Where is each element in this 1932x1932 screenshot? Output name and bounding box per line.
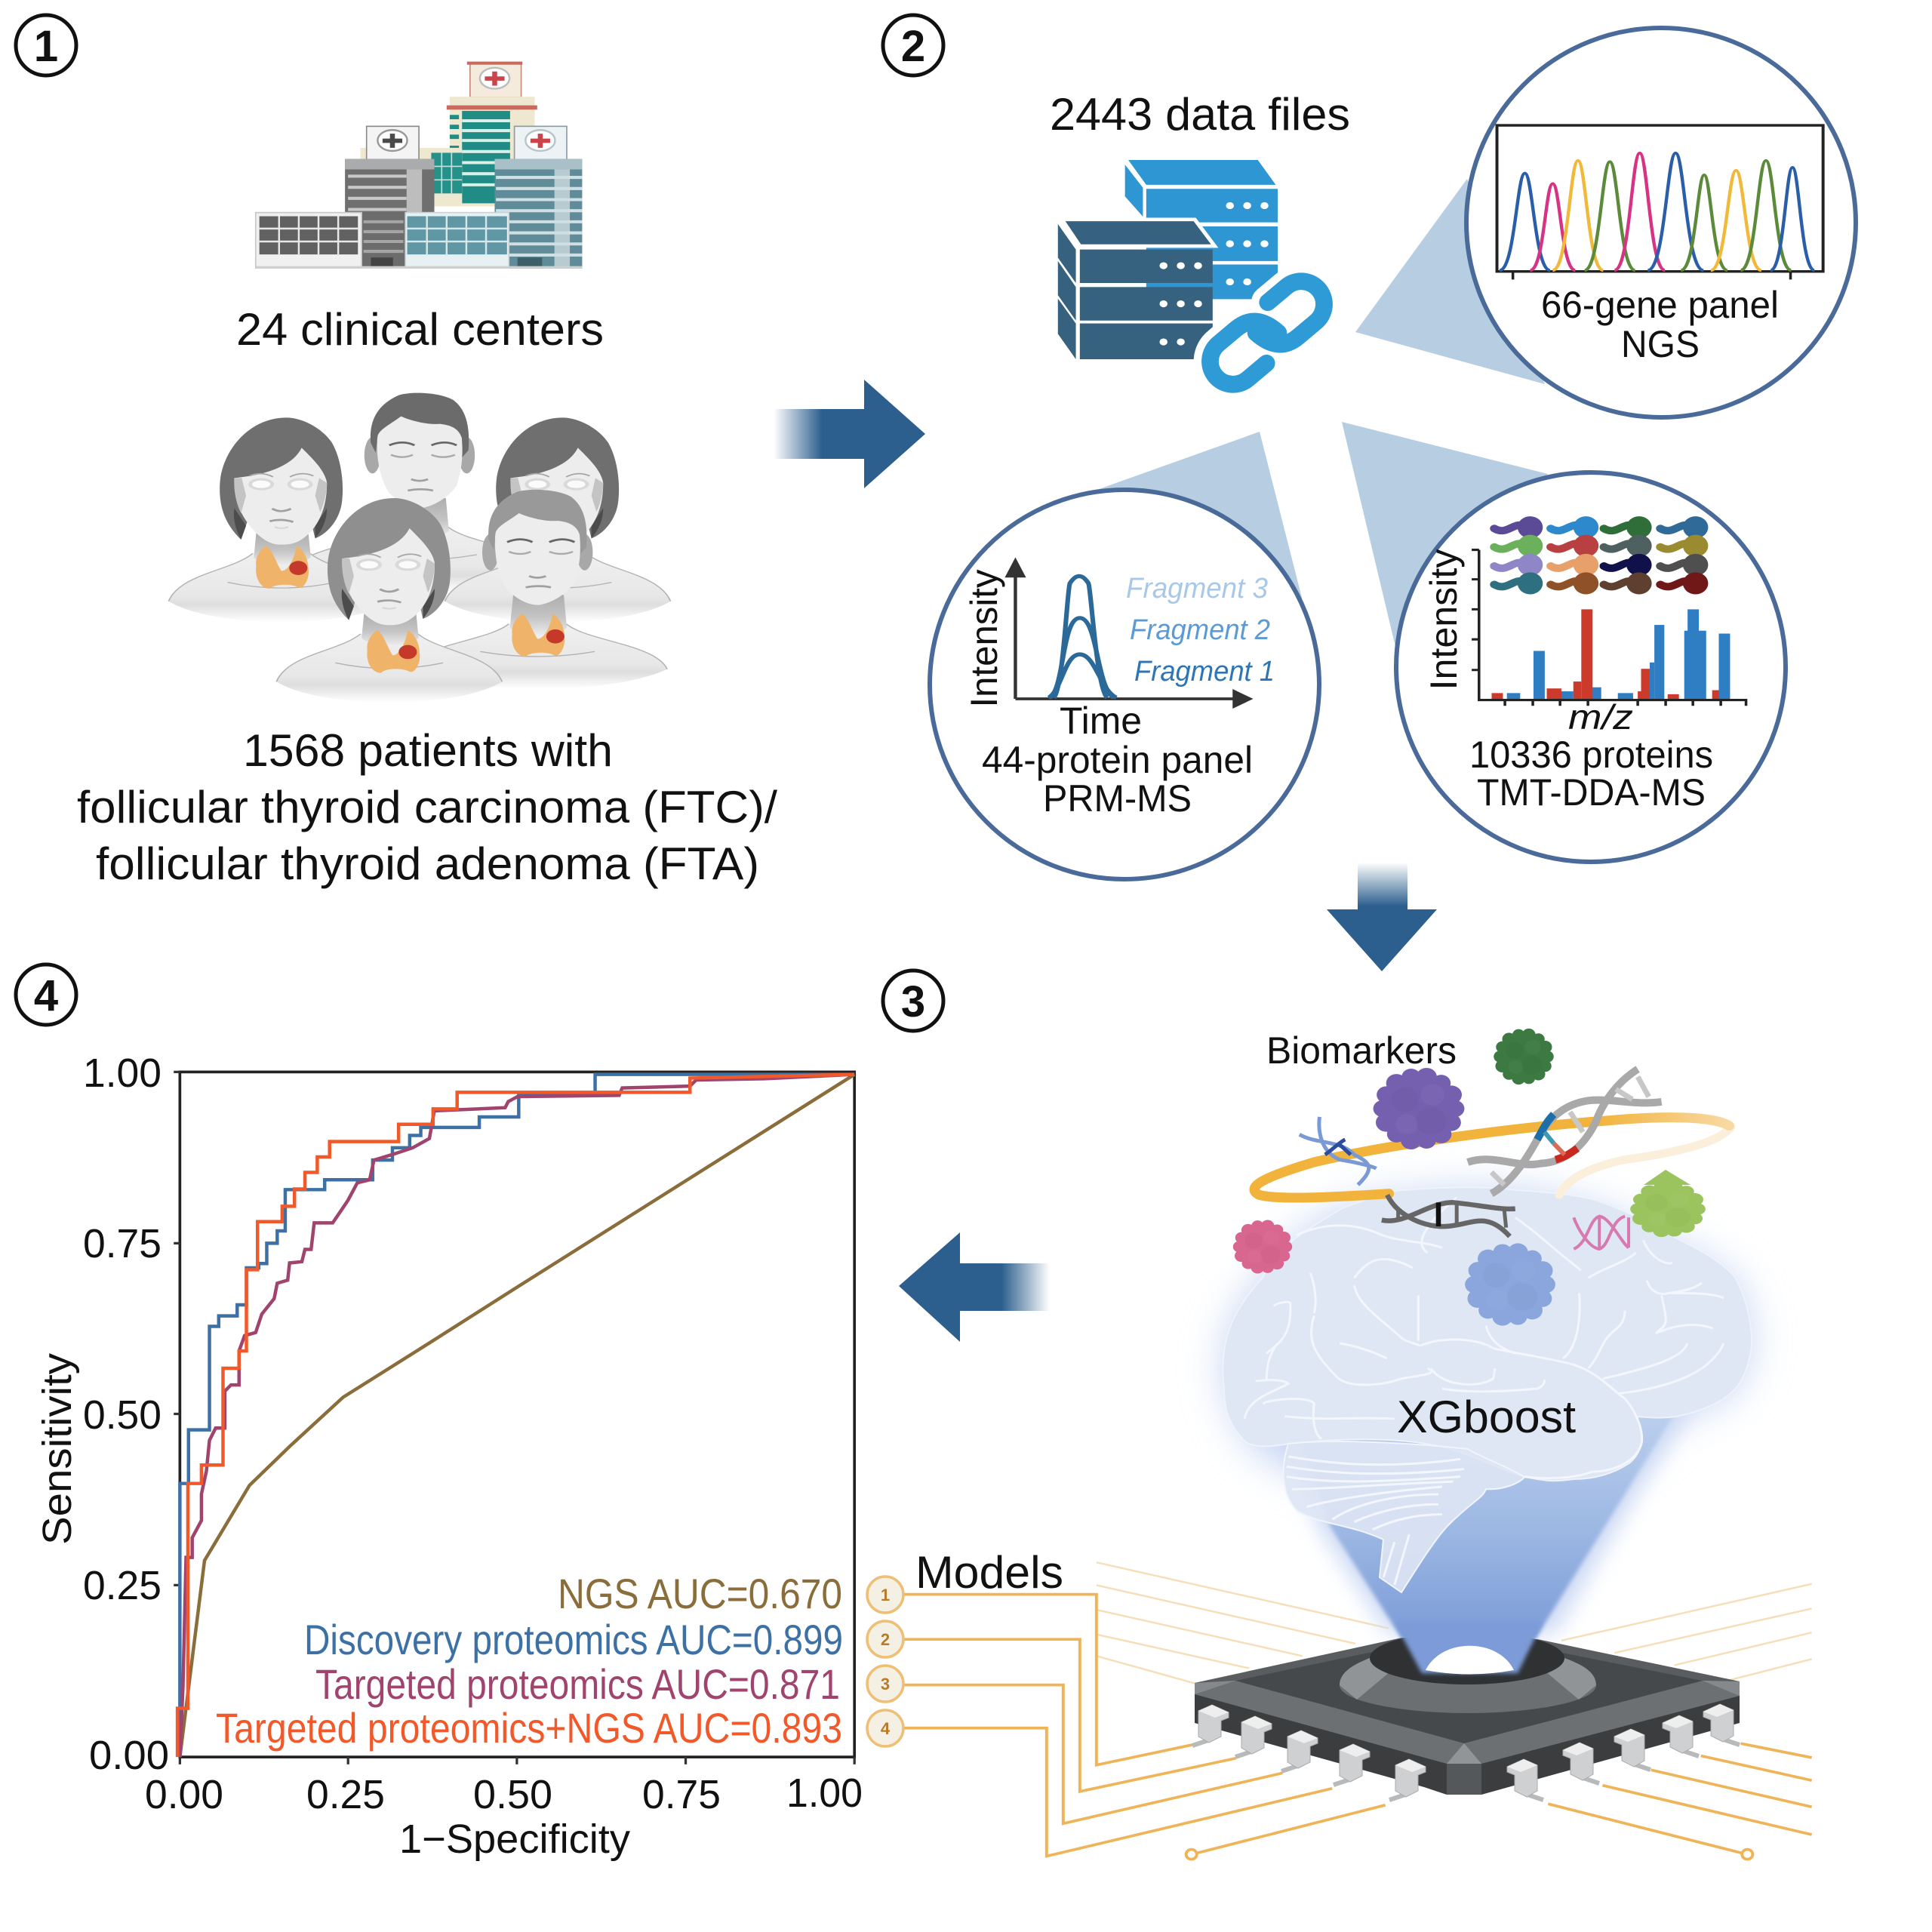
legend: AUC values: Targeted proteomics AUC=0.871 [315, 1660, 840, 1708]
x axis tick labels: 0.50 [473, 1772, 552, 1817]
panel: PRM-MS magnified circle [930, 490, 1319, 879]
y axis tick labels: 0.75 [83, 1221, 162, 1266]
model number badges: 3 [881, 1675, 890, 1694]
label: Models: Models [915, 1547, 1063, 1598]
chip: beam source and light dome [1395, 1623, 1543, 1674]
label: 2443 data files: 2443 data files [1050, 89, 1350, 140]
protein: dark green [1494, 1029, 1554, 1084]
badge 4 [16, 964, 76, 1025]
label: 44-protein panel PRM-MS: PRM-MS [1043, 777, 1192, 820]
label: 10336 proteins TMT-DDA-MS: 10336 proteins [1469, 734, 1713, 776]
y axis tick labels: 0.00 [89, 1733, 169, 1778]
chip: pins [1192, 1704, 1740, 1800]
callout wedge: NGS [1355, 179, 1545, 384]
badge 4: 4 [34, 971, 58, 1020]
badge 2: 2 [901, 22, 925, 71]
icon: linked data servers [1058, 160, 1334, 394]
label: 24 clinical centers: 24 clinical centers [236, 304, 604, 355]
arrow: panel 2 to panel 3 [1327, 863, 1437, 971]
curve: Discovery proteomics [180, 1075, 854, 1757]
DNA: grey with coloured segment [1468, 1069, 1662, 1194]
y axis tick labels [83, 1051, 169, 1778]
hologram beam glow [1283, 1404, 1690, 1634]
legend: fragments [1126, 573, 1275, 688]
brain glow [1223, 1189, 1752, 1479]
x axis tick labels: 0.25 [306, 1772, 385, 1817]
badge 1: 1 [34, 22, 58, 71]
ring: orange orbit [1254, 1118, 1731, 1198]
chart: fragment peaks [1004, 558, 1254, 709]
label: 44-protein panel PRM-MS: 44-protein panel [982, 739, 1253, 781]
protein: light green [1630, 1170, 1706, 1237]
chip: body [1195, 1632, 1740, 1795]
axis label: intensity: Intensity [1423, 549, 1465, 690]
x axis title: 1−Specificity [399, 1817, 630, 1862]
label: 66-gene panel NGS: 66-gene panel [1541, 284, 1779, 326]
arrow: panel 1 to panel 2 [774, 380, 925, 488]
badge 3: 3 [901, 977, 925, 1026]
legend: fragments: Fragment 3 [1126, 573, 1268, 605]
model number badges: 1 [881, 1586, 890, 1604]
chart: ROC plot area and curves [174, 1072, 854, 1764]
panel 1: patient cohort [16, 15, 777, 889]
chart: sequencing chromatogram [1497, 125, 1823, 279]
hologram beam [1298, 1411, 1676, 1639]
model output traces [884, 1595, 1812, 1860]
model number badges: 2 [881, 1630, 890, 1649]
axis label: m/z: m/z [1568, 697, 1633, 737]
x axis tick labels: 0.75 [642, 1772, 721, 1817]
model number badges: 4 [881, 1719, 891, 1738]
legend: AUC values: NGS AUC=0.670 [558, 1570, 842, 1617]
axis label: intensity: Intensity [963, 569, 1005, 708]
illustration: patients with thyroid nodules [168, 393, 671, 703]
label: 10336 proteins TMT-DDA-MS [1469, 734, 1713, 814]
protein: purple [1374, 1068, 1464, 1149]
DNA: blue [1300, 1117, 1377, 1185]
DNA: dark [1382, 1195, 1515, 1236]
badge 2 [883, 15, 943, 75]
panel 4: ROC chart [16, 964, 863, 1862]
cohort description: 1568 patients with [243, 725, 613, 776]
protein: blue [1465, 1243, 1555, 1326]
legend: AUC values: Discovery proteomics AUC=0.899 [304, 1616, 843, 1663]
label: 44-protein panel PRM-MS: Time [1060, 700, 1142, 742]
callout wedge: PRM-MS [1093, 432, 1303, 601]
DNA: pink [1574, 1217, 1629, 1249]
curve: Targeted proteomics [180, 1075, 854, 1757]
curve: Targeted proteomics + NGS [177, 1075, 854, 1757]
model number badges [867, 1577, 903, 1746]
badge 3 [883, 971, 943, 1031]
arrow: panel 3 to panel 4 [899, 1232, 1050, 1342]
callout wedge: TMT-DDA-MS [1342, 422, 1548, 647]
panel: NGS magnified circle [1466, 28, 1856, 417]
label: XGboost: XGboost [1397, 1392, 1576, 1442]
legend: fragments: Fragment 1 [1134, 656, 1275, 688]
protein: pink [1233, 1220, 1292, 1274]
label: 10336 proteins TMT-DDA-MS: TMT-DDA-MS [1477, 771, 1706, 814]
label: Biomarkers: Biomarkers [1266, 1029, 1457, 1072]
y axis tick labels: 0.25 [83, 1563, 162, 1608]
cohort description [77, 725, 777, 889]
panel: TMT-DDA-MS magnified circle [1396, 472, 1786, 862]
x axis tick labels [145, 1770, 863, 1817]
panel 3: XGBoost model [867, 971, 1812, 1860]
cohort description: follicular thyroid adenoma (FTA) [96, 838, 759, 889]
brain [1223, 1187, 1752, 1592]
legend: fragments: Fragment 2 [1130, 614, 1270, 646]
legend: AUC values: Targeted proteomics+NGS AUC=0.893 [216, 1704, 842, 1752]
x axis tick labels: 0.00 [145, 1772, 223, 1817]
badge 1 [16, 15, 76, 75]
faint circuit traces [1097, 1562, 1812, 1684]
y axis title: Sensitivity [35, 1353, 80, 1545]
y axis tick labels: 1.00 [83, 1051, 162, 1096]
y axis tick labels: 0.50 [83, 1392, 162, 1438]
label: 66-gene panel NGS [1541, 284, 1779, 365]
icon: tagged peptides [1494, 516, 1708, 594]
cohort description: follicular thyroid carcinoma (FTC)/ [77, 782, 777, 832]
label: 66-gene panel NGS: NGS [1621, 323, 1700, 365]
panel 2: multi-omics data [883, 15, 1856, 879]
curve: NGS [180, 1075, 854, 1757]
icon: hospital buildings [256, 62, 582, 269]
chart: mass spectrum [1472, 516, 1747, 706]
label: 44-protein panel PRM-MS [982, 700, 1253, 820]
legend: AUC values [216, 1570, 843, 1752]
x axis tick labels: 1.00 [786, 1770, 863, 1816]
